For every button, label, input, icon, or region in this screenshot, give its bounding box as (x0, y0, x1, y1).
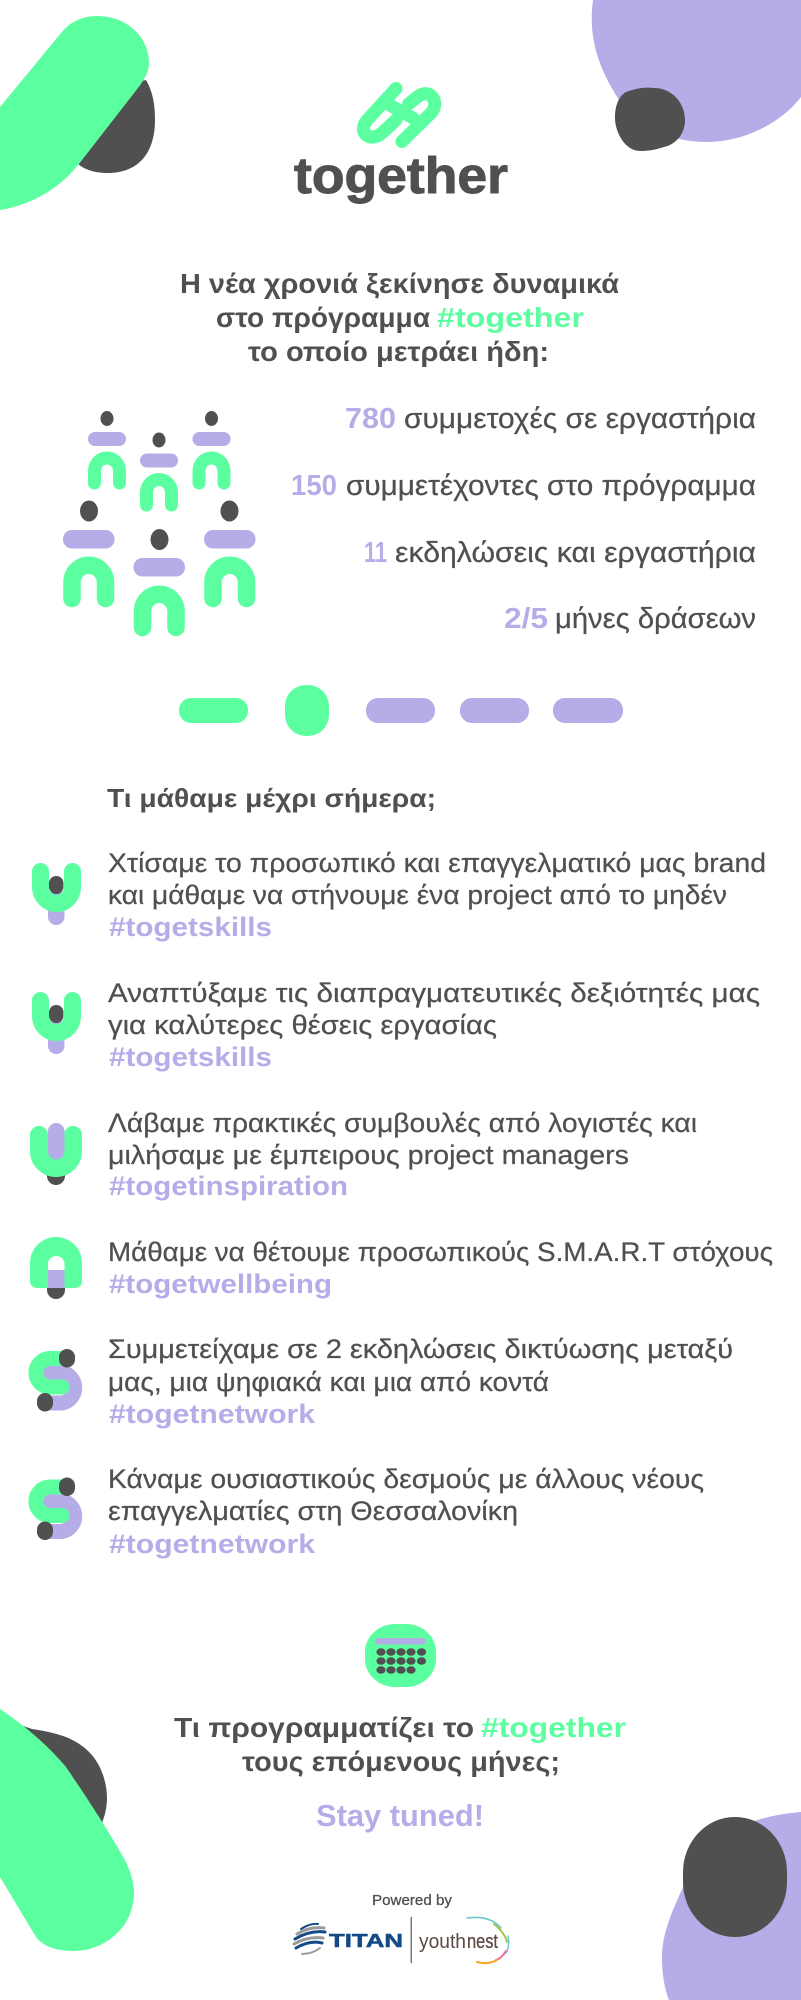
icon: network (36, 1478, 75, 1540)
heading: intro: #together (437, 302, 584, 333)
decorative shapes: top left (0, 16, 155, 210)
logo wordmark: together (294, 147, 508, 204)
icon: skills (40, 1000, 72, 1054)
stats list: μήνες δράσεων (555, 603, 756, 635)
icon: titan globe (294, 1924, 325, 1954)
decorative shapes: bottom left (0, 1709, 134, 1951)
text: μας, μια ψηφιακά και μια από κοντά (108, 1367, 549, 1397)
icon: together link mark (363, 88, 435, 142)
text (108, 1237, 773, 1299)
text: #togetnetwork (109, 1529, 316, 1559)
text: μιλήσαμε με έμπειρους project managers (108, 1140, 629, 1170)
heading: intro (180, 268, 619, 367)
icon: group of people (63, 411, 256, 628)
heading: intro: στο πρόγραμμα (216, 302, 430, 333)
heading: next months: τους επόμενους μήνες; (242, 1746, 560, 1777)
list item 2 (40, 978, 760, 1072)
list item 6 (36, 1464, 704, 1559)
stay tuned: Stay tuned! (316, 1798, 484, 1833)
icon: skills (40, 872, 72, 925)
sponsor logos (294, 1917, 509, 1963)
text: Συμμετείχαμε σε 2 εκδηλώσεις δικτύωσης μεταξύ (108, 1334, 733, 1364)
stats list: συμμετοχές σε εργαστήρια (404, 403, 756, 435)
powered by: Powered by (372, 1892, 452, 1909)
text: #togetskills (109, 912, 272, 942)
decorative shapes: top right (592, 0, 801, 151)
text: Αναπτύξαμε τις διαπραγματευτικές δεξιότητές μας (108, 978, 760, 1008)
youthnest wordmark: nest (467, 1931, 498, 1953)
icon: calendar (365, 1624, 436, 1687)
divider: progress pills (179, 685, 623, 736)
text: #togetinspiration (109, 1171, 348, 1201)
text (108, 1334, 733, 1429)
text: #togetwellbeing (109, 1269, 332, 1299)
text: Λάβαμε πρακτικές συμβουλές από λογιστές και (108, 1108, 697, 1138)
list item 5 (36, 1334, 733, 1429)
heading: next months (174, 1712, 626, 1777)
stats list: συμμετέχοντες στο πρόγραμμα (346, 470, 756, 502)
list item 4 (30, 1237, 773, 1299)
heading: what we learned: Τι μάθαμε μέχρι σήμερα; (107, 783, 436, 813)
text (108, 978, 760, 1072)
youthnest arcs (467, 1917, 509, 1963)
youthnest wordmark (419, 1931, 498, 1953)
text: Μάθαμε να θέτουμε προσωπικούς S.M.A.R.T στόχους (108, 1237, 773, 1267)
stats list: 780 (345, 403, 396, 435)
icon: network (36, 1349, 75, 1412)
text: #togetnetwork (109, 1399, 316, 1429)
icon: inspiration (39, 1123, 73, 1185)
stats list: 11 (364, 537, 387, 569)
stats list: 2/5 (504, 603, 548, 635)
text: επαγγελματίες στη Θεσσαλονίκη (108, 1496, 518, 1526)
icon: wellbeing (30, 1237, 82, 1299)
text (108, 848, 766, 942)
stats list (291, 403, 756, 635)
youthnest wordmark: youth (419, 1931, 466, 1953)
text: Χτίσαμε το προσωπικό και επαγγελματικό μας brand (108, 848, 766, 878)
text: για καλύτερες θέσεις εργασίας (108, 1010, 497, 1040)
text (108, 1108, 697, 1201)
text (108, 1464, 704, 1559)
heading: intro: Η νέα χρονιά ξεκίνησε δυναμικά (180, 268, 619, 299)
heading: next months: #together (481, 1712, 626, 1743)
text: και μάθαμε να στήνουμε ένα project από το μηδέν (108, 880, 727, 910)
decorative shapes: bottom right (662, 1812, 801, 2000)
stats list: εκδηλώσεις και εργαστήρια (395, 537, 756, 569)
heading: next months: Τι προγραμματίζει το (174, 1712, 474, 1743)
list item 1 (40, 848, 766, 942)
stats list: 150 (291, 470, 337, 502)
heading: intro: το οποίο μετράει ήδη: (248, 336, 549, 367)
text: #togetskills (109, 1042, 272, 1072)
list item 3 (39, 1108, 697, 1201)
text: Κάναμε ουσιαστικούς δεσμούς με άλλους νέους (108, 1464, 704, 1494)
logo (294, 88, 508, 204)
titan wordmark: TITAN (329, 1931, 403, 1951)
